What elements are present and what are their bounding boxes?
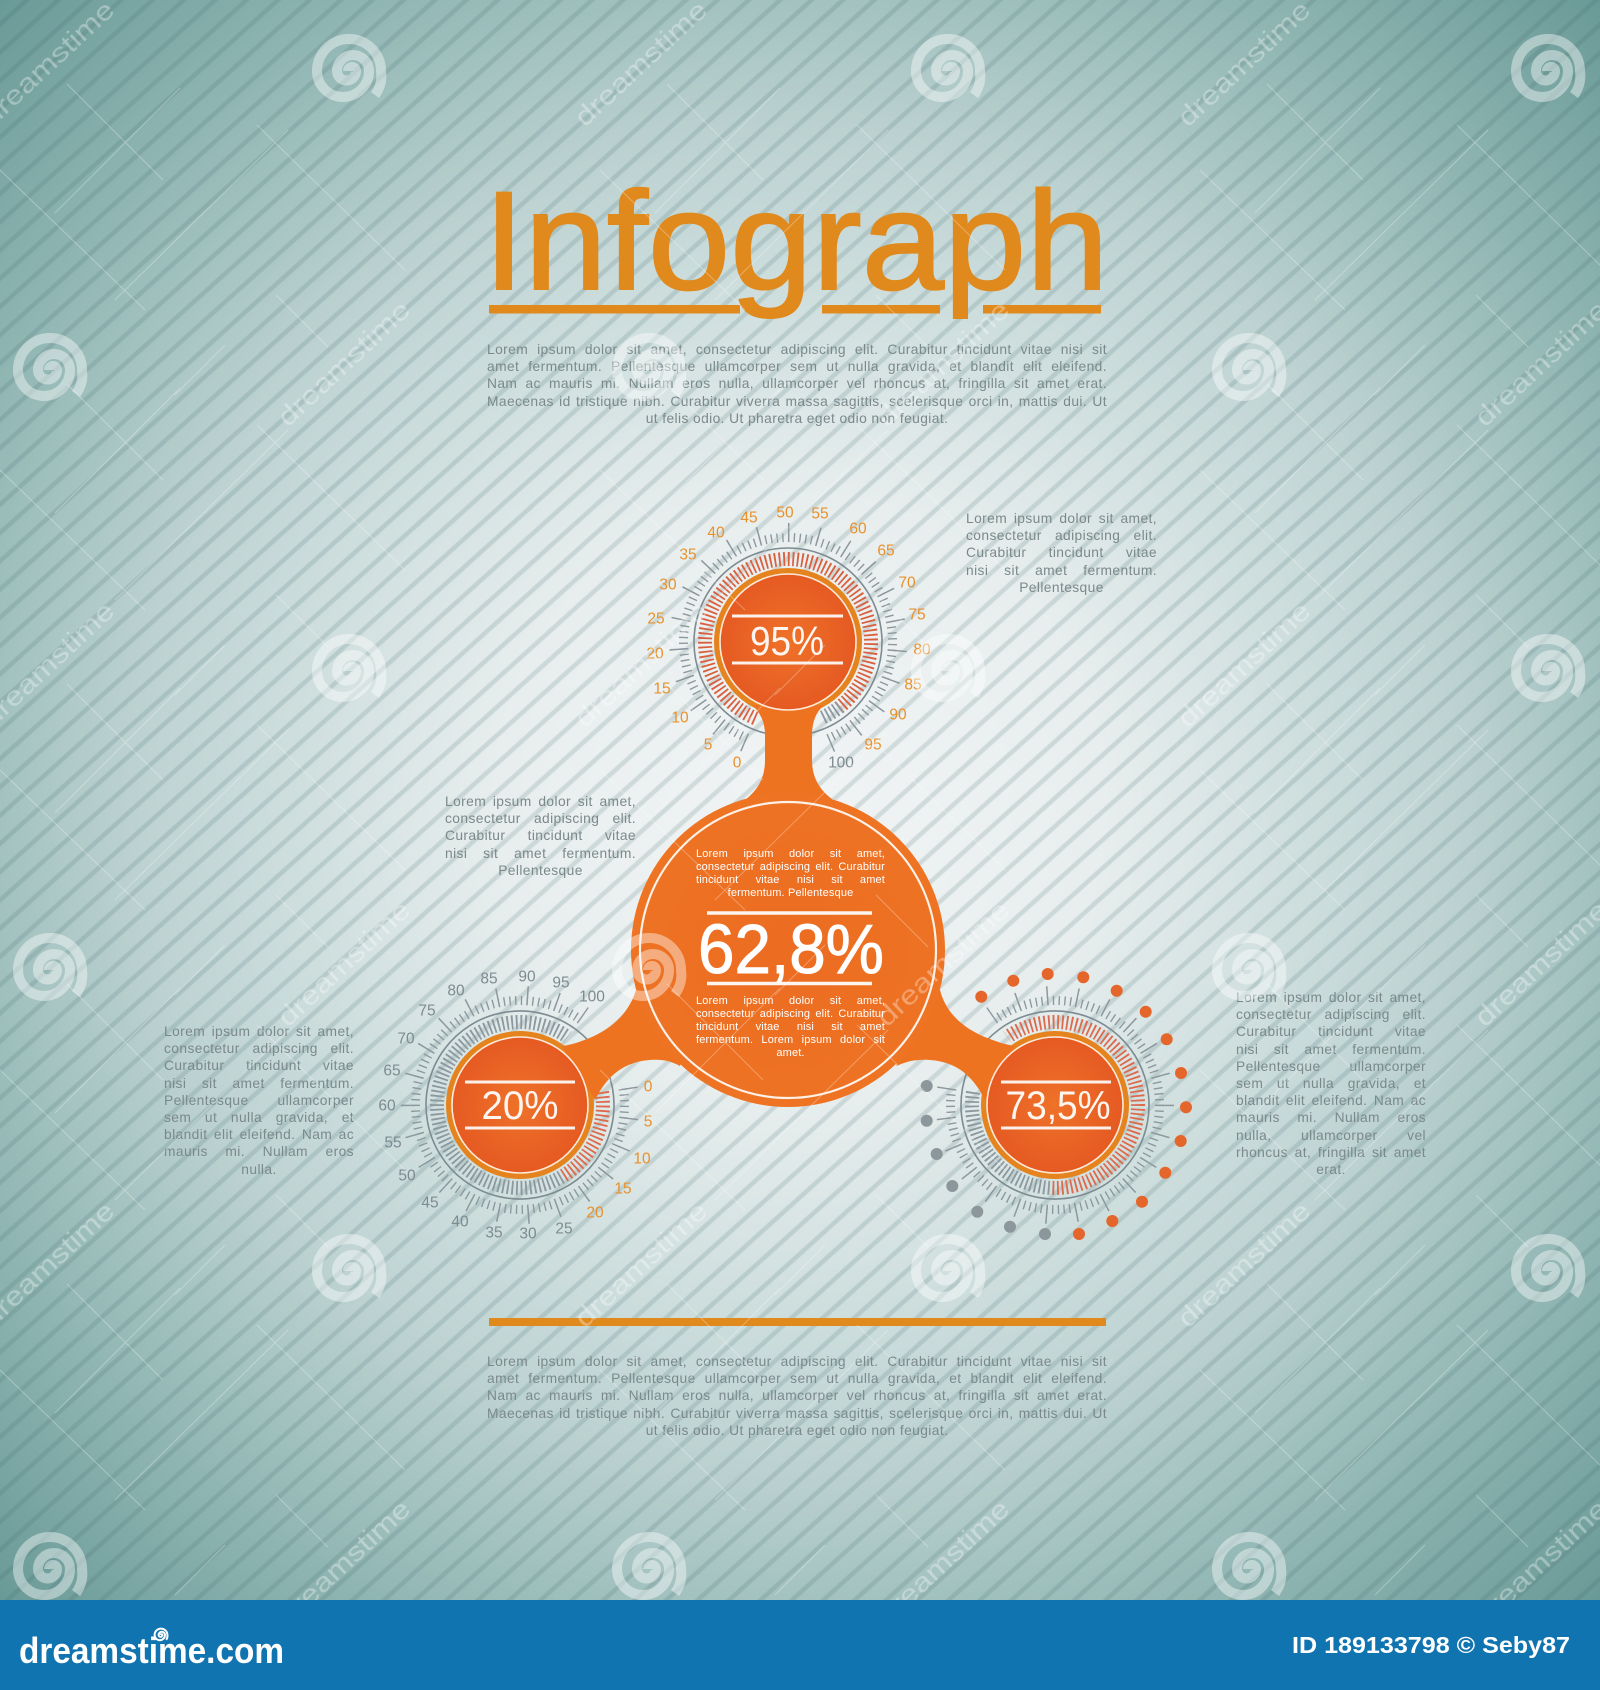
side text: lower left: Curabitur tincidunt vitae xyxy=(164,1058,354,1073)
footer credit: ID 189133798 © Seby87 xyxy=(1292,1632,1570,1658)
top gauge scale labels: 30 xyxy=(659,576,677,594)
side text: lower right: Pellentesque ullamcorper xyxy=(1236,1059,1426,1074)
left gauge scale labels: 10 xyxy=(633,1150,651,1168)
side text: top right: Curabitur tincidunt vitae xyxy=(966,545,1157,560)
side text: lower left: nulla. xyxy=(241,1162,277,1177)
side text: lower left: nisi sit amet fermentum. xyxy=(164,1076,354,1091)
closing paragraph: Nam ac mauris mi. Nullam eros nulla, ullamcorper vel rhoncus at, fringilla sit amet erat. xyxy=(487,1388,1107,1403)
left gauge scale labels: 80 xyxy=(447,982,465,1000)
gauge head: 20% xyxy=(452,1037,588,1173)
side text: lower right: rhoncus at, fringilla sit amet xyxy=(1236,1145,1426,1160)
top gauge scale labels: 100 xyxy=(828,754,854,772)
watermark overlay: dreamstime xyxy=(271,894,416,1032)
top gauge scale labels: 55 xyxy=(811,506,829,522)
side text: top right: consectetur adipiscing elit. xyxy=(966,528,1157,543)
left gauge scale labels: 65 xyxy=(383,1062,401,1080)
top gauge scale labels: 25 xyxy=(647,610,665,628)
top gauge scale labels: 75 xyxy=(908,606,926,624)
closing paragraph: ut felis odio. Ut pharetra eget odio non feugiat. xyxy=(646,1423,948,1438)
intro paragraph: Nam ac mauris mi. Nullam eros nulla, ullamcorper vel rhoncus at, fringilla sit amet erat. xyxy=(487,376,1107,391)
side text: middle left: Lorem ipsum dolor sit amet, xyxy=(445,794,636,809)
hub text: upper: consectetur adipiscing elit. Curabitur xyxy=(696,861,885,873)
side text: top right xyxy=(966,511,1157,595)
top gauge scale labels: 50 xyxy=(776,504,794,522)
hub text: upper: Lorem ipsum dolor sit amet, xyxy=(696,848,885,860)
watermark overlay: dreamstime xyxy=(870,294,1015,432)
watermark overlay: dreamstime xyxy=(1468,894,1600,1032)
hub text: lower: Lorem ipsum dolor sit amet, xyxy=(696,994,885,1006)
side text: lower right xyxy=(1236,990,1426,1177)
watermark overlay: dreamstime xyxy=(568,1195,713,1333)
hub text: lower: tincidunt vitae nisi sit amet xyxy=(696,1020,885,1032)
closing paragraph xyxy=(487,1354,1107,1438)
left gauge scale labels: 25 xyxy=(555,1220,573,1238)
closing paragraph: Maecenas id tristique nibh. Curabitur viverra massa sagittis, scelerisque orci in, mattis dui. Ut xyxy=(487,1406,1107,1421)
gauge head: 95%: 95% xyxy=(750,618,824,664)
watermark overlay: dreamstime xyxy=(1171,1195,1316,1333)
side text: middle left: consectetur adipiscing elit. xyxy=(445,811,636,826)
hub text: lower: consectetur adipiscing elit. Curabitur xyxy=(696,1008,885,1020)
top gauge scale labels: 35 xyxy=(679,546,697,564)
side text: middle left xyxy=(445,794,636,878)
hub text: lower xyxy=(696,994,885,1058)
left gauge scale labels: 15 xyxy=(614,1180,632,1198)
watermark overlay: dreamstime xyxy=(1171,595,1316,733)
closing paragraph: amet fermentum. Pellentesque ullamcorper sem ut nulla gravida, et blandit elit eleifend. xyxy=(487,1371,1107,1386)
side text: lower left xyxy=(164,1024,354,1177)
intro paragraph: ut felis odio. Ut pharetra eget odio non feugiat. xyxy=(646,411,948,426)
right gauge dots xyxy=(921,968,1192,1240)
side text: lower right: sem ut nulla gravida, et xyxy=(1236,1076,1426,1091)
hub text: lower: fermentum. Lorem ipsum dolor sit xyxy=(696,1034,885,1046)
side text: lower left: Pellentesque ullamcorper xyxy=(164,1093,354,1108)
side text: lower left: Lorem ipsum dolor sit amet, xyxy=(164,1024,354,1039)
side text: lower left: mauris mi. Nullam eros xyxy=(164,1144,354,1159)
top gauge scale labels: 5 xyxy=(704,736,712,754)
watermark overlay: dreamstime xyxy=(568,595,713,733)
left gauge scale labels: 40 xyxy=(451,1214,469,1230)
gauge: top ticks xyxy=(678,533,898,752)
left gauge scale labels: 45 xyxy=(421,1194,439,1212)
side text: lower left: sem ut nulla gravida, et xyxy=(164,1110,354,1125)
side text: top right: Lorem ipsum dolor sit amet, xyxy=(966,511,1157,526)
intro paragraph: Lorem ipsum dolor sit amet, consectetur adipiscing elit. Curabitur tincidunt vitae nisi sit xyxy=(487,342,1107,357)
watermark overlay: dreamstime xyxy=(568,0,713,132)
gauge head: 95% xyxy=(720,574,856,710)
side text: top right: Pellentesque xyxy=(1019,580,1104,595)
intro paragraph: amet fermentum. Pellentesque ullamcorper sem ut nulla gravida, et blandit elit eleifend. xyxy=(487,359,1107,374)
top gauge scale labels: 65 xyxy=(877,542,895,560)
side text: lower right: mauris mi. Nullam eros xyxy=(1236,1110,1426,1125)
title: Infograph xyxy=(484,162,1108,319)
hub connectors and centre circle xyxy=(562,705,1015,1107)
hub text: upper: fermentum. Pellentesque xyxy=(728,887,853,899)
gauge head: 73,5% xyxy=(987,1037,1123,1173)
side text: lower right: Curabitur tincidunt vitae xyxy=(1236,1024,1426,1039)
top gauge scale labels: 10 xyxy=(671,710,689,726)
top gauge scale labels: 15 xyxy=(653,680,671,698)
left gauge scale labels: 55 xyxy=(384,1134,402,1152)
side text: lower left: consectetur adipiscing elit. xyxy=(164,1041,354,1056)
left gauge scale labels: 5 xyxy=(644,1114,652,1130)
watermark overlay: dreamstime xyxy=(1468,294,1600,432)
hub value: 62,8%: 62,8% xyxy=(698,910,884,988)
left gauge scale labels: 20 xyxy=(586,1204,604,1222)
intro paragraph: Maecenas id tristique nibh. Curabitur viverra massa sagittis, scelerisque orci in, mattis dui. Ut xyxy=(487,394,1107,409)
closing paragraph: Lorem ipsum dolor sit amet, consectetur adipiscing elit. Curabitur tincidunt vitae nisi sit xyxy=(487,1354,1107,1369)
side text: middle left: Pellentesque xyxy=(498,863,583,878)
side text: lower right: consectetur adipiscing elit. xyxy=(1236,1007,1426,1022)
gauge head: 20%: 20% xyxy=(482,1084,558,1128)
left gauge scale labels: 100 xyxy=(579,988,605,1006)
side text: lower right: nulla, ullamcorper vel xyxy=(1236,1128,1426,1143)
gauge: right ticks xyxy=(904,954,1206,1256)
gauge: left ticks xyxy=(369,954,671,1256)
side text: lower right: Lorem ipsum dolor sit amet, xyxy=(1236,990,1426,1005)
hub text: upper: tincidunt vitae nisi sit amet xyxy=(696,874,885,886)
watermark overlay: dreamstime xyxy=(1171,0,1316,132)
left gauge scale labels: 0 xyxy=(644,1078,653,1096)
top gauge scale labels: 85 xyxy=(904,676,922,694)
side text: middle left: Curabitur tincidunt vitae xyxy=(445,828,636,843)
gauge head: 73,5%: 73,5% xyxy=(1006,1084,1110,1128)
top gauge scale labels: 90 xyxy=(889,706,907,724)
left gauge scale labels: 85 xyxy=(480,970,498,988)
left gauge scale labels xyxy=(378,968,653,1242)
watermark overlay: dreamstime xyxy=(271,294,416,432)
hub text: upper xyxy=(696,848,885,899)
left gauge scale labels: 60 xyxy=(378,1098,396,1114)
side text: lower right: blandit elit eleifend. Nam ac xyxy=(1236,1093,1426,1108)
top gauge scale labels: 95 xyxy=(864,736,882,754)
left gauge scale labels: 50 xyxy=(398,1168,416,1184)
left gauge scale labels: 30 xyxy=(519,1226,537,1242)
top gauge scale labels: 60 xyxy=(849,520,867,538)
top gauge scale labels: 0 xyxy=(733,754,742,772)
hub text: lower: amet. xyxy=(776,1046,805,1058)
top gauge scale labels: 80 xyxy=(913,642,931,658)
left gauge scale labels: 90 xyxy=(518,968,536,986)
side text: top right: nisi sit amet fermentum. xyxy=(966,563,1157,578)
watermark overlay: dreamstime xyxy=(870,894,1015,1032)
left gauge scale labels: 70 xyxy=(397,1030,415,1048)
top gauge scale labels: 45 xyxy=(740,510,758,526)
intro paragraph xyxy=(487,342,1107,426)
left gauge scale labels: 95 xyxy=(552,974,570,992)
side text: middle left: nisi sit amet fermentum. xyxy=(445,846,636,861)
side text: lower right: nisi sit amet fermentum. xyxy=(1236,1042,1426,1057)
footer logo: dreamstime.com xyxy=(19,1630,284,1671)
top gauge scale labels: 40 xyxy=(707,524,725,542)
top gauge scale labels xyxy=(646,504,931,772)
bottom divider xyxy=(489,1318,1106,1326)
top gauge scale labels: 20 xyxy=(646,646,664,662)
left gauge scale labels: 35 xyxy=(485,1224,503,1242)
side text: lower right: erat. xyxy=(1316,1162,1346,1177)
side text: lower left: blandit elit eleifend. Nam ac xyxy=(164,1127,354,1142)
left gauge scale labels: 75 xyxy=(418,1002,436,1020)
top gauge scale labels: 70 xyxy=(898,574,916,592)
